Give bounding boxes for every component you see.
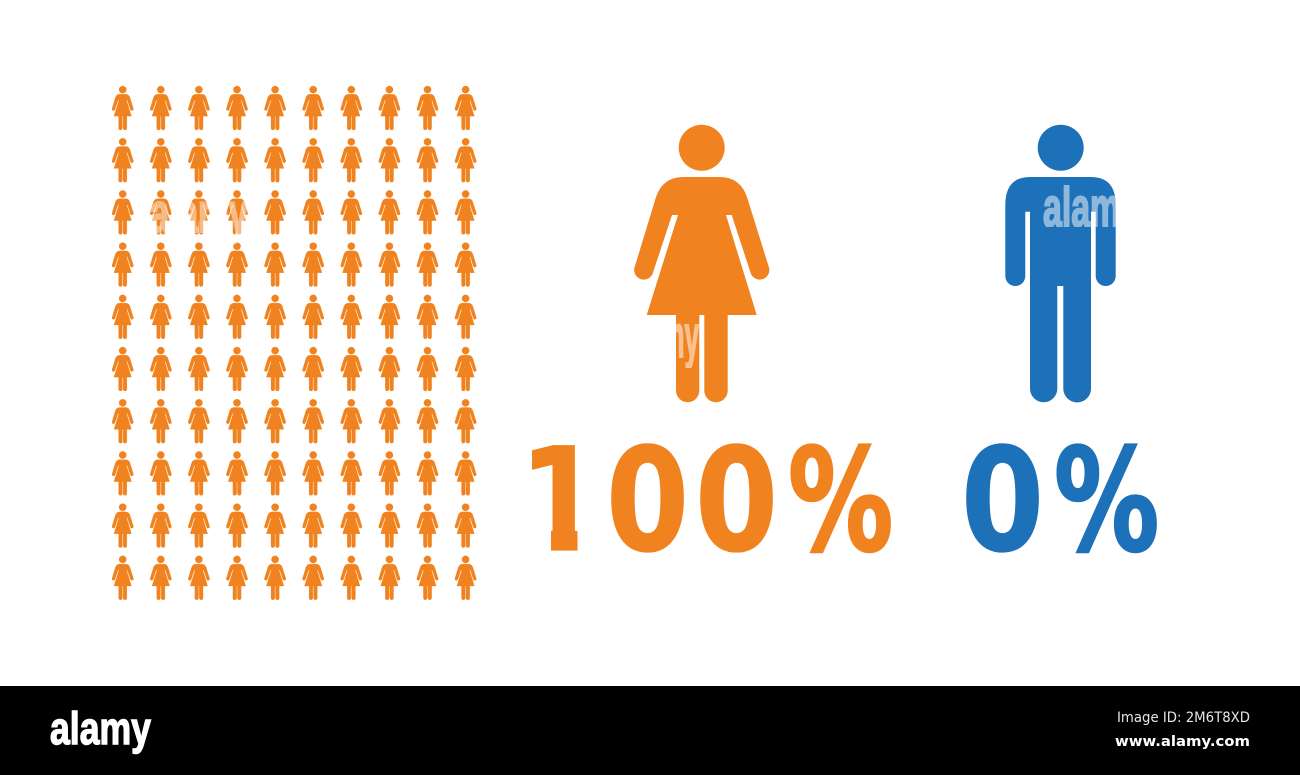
icon: large woman — [634, 125, 769, 402]
percentage: 0%: % — [1054, 419, 1159, 584]
percentage: 0% — [961, 419, 1159, 585]
percentage: 100%: 0 — [606, 419, 689, 585]
watermark on grid: alamy — [150, 181, 248, 244]
image id: Image ID: 2M6T8XD — [1117, 710, 1250, 726]
watermark on man torso: alamy — [1043, 176, 1139, 238]
icon: large man — [1005, 125, 1116, 402]
percentage: 0%: 0 — [961, 419, 1044, 585]
percentage: 100% — [532, 443, 891, 554]
website: www.alamy.com — [1115, 734, 1250, 750]
percentage: 100%: 0 — [695, 419, 778, 585]
footer logo: alamy — [50, 703, 151, 754]
footer bar — [0, 686, 1300, 775]
infographic canvas: alamy — [625, 303, 699, 370]
pictogram grid: 100 women — [112, 86, 476, 600]
percentage: 100%: % — [788, 419, 893, 584]
percentage: 100%: 1 — [519, 418, 603, 585]
